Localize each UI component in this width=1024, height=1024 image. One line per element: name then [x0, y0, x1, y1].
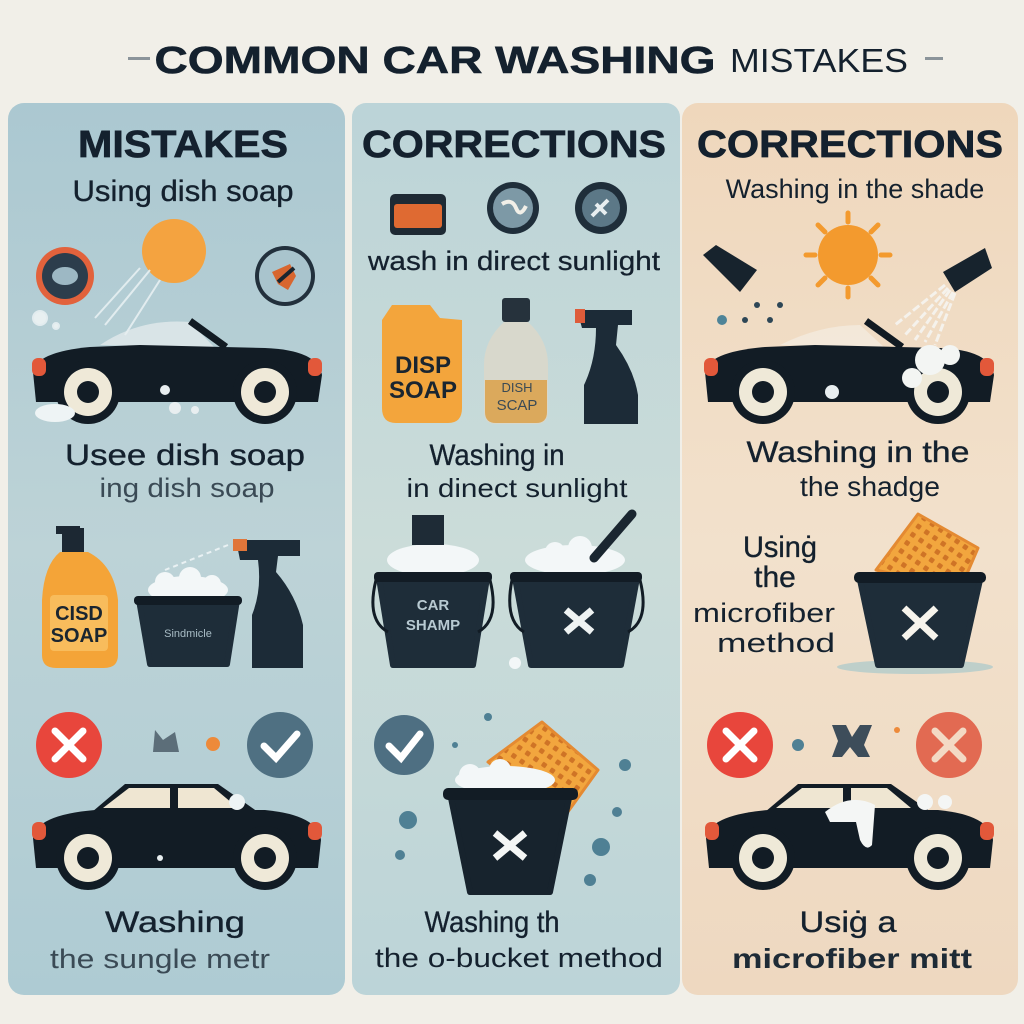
panel: corrections right	[682, 103, 1018, 995]
panel background right	[682, 103, 1018, 995]
caption: washing the two-bucket method	[375, 906, 663, 973]
icon: car shampoo bucket: SHAMP	[406, 617, 460, 634]
icon: small mixed glyph	[153, 730, 220, 752]
icon: spray bottle	[575, 309, 638, 424]
icon: right check	[247, 712, 313, 778]
title: MISTAKES	[730, 42, 908, 79]
subheading: wash in direct sunlight: wash in direct sunlight	[367, 246, 661, 276]
car: coupe	[32, 784, 322, 890]
icon: foam bucket: Sindmicle	[164, 628, 212, 640]
caption: washing the two-bucket method: Washing th	[424, 906, 560, 939]
title: COMMON CAR WASHING	[154, 40, 716, 82]
icon: sun with rays	[806, 213, 890, 297]
caption: using the microfiber method: microfiber	[693, 598, 835, 628]
icon: right spray nozzle	[895, 248, 992, 345]
caption: using the microfiber method: the	[754, 561, 796, 594]
panel: corrections middle	[352, 103, 680, 995]
heading: corrections: CORRECTIONS	[362, 124, 666, 166]
caption: using a microfiber mitt	[732, 906, 972, 974]
icon: wrong cross	[707, 712, 773, 778]
icon: bucket with cross	[509, 514, 643, 669]
icon: spray bottle	[165, 539, 303, 668]
caption: use dish soap: Usee dish soap	[65, 439, 305, 472]
caption: using a microfiber mitt: Usiġ a	[800, 906, 897, 939]
caption: washing in direct sunlight: in dinect sunlight	[406, 473, 628, 503]
title	[128, 40, 943, 82]
caption: washing in the shade: Washing in the	[746, 436, 970, 469]
caption: using the microfiber method: method	[717, 628, 835, 658]
heading: corrections: CORRECTIONS	[697, 124, 1003, 166]
caption: washing the single method	[50, 906, 270, 974]
icon: foam bucket	[134, 567, 242, 664]
panel: mistakes	[8, 103, 345, 995]
caption: use dish soap: ing dish soap	[100, 473, 274, 503]
caption: use dish soap	[65, 439, 305, 503]
caption: washing the two-bucket method: the o-bucket method	[375, 943, 663, 973]
heading: mistakes: MISTAKES	[78, 124, 288, 166]
water spray	[33, 268, 160, 335]
icon: car shampoo bucket	[373, 515, 493, 665]
panel background middle	[352, 103, 680, 995]
icon: bucket with sponge	[837, 514, 993, 674]
icon: left badge	[36, 247, 94, 305]
icon: orange sponge	[390, 194, 446, 235]
icon: sun	[142, 219, 206, 283]
icon: right badge	[255, 246, 315, 306]
icon: check	[374, 715, 434, 775]
car: convertible	[32, 321, 322, 424]
icon: faded cross	[916, 712, 982, 778]
caption: washing in the shade	[746, 436, 970, 502]
icon: dish soap bottle: SOAP	[51, 625, 107, 647]
icon: dish soap jug: DISP	[395, 352, 451, 379]
icon: small glyph	[792, 725, 900, 757]
caption: washing in the shade: the shadge	[800, 471, 940, 502]
car: convertible with foam	[704, 321, 994, 424]
caption: using the microfiber method	[693, 531, 835, 658]
caption: using a microfiber mitt: microfiber mitt	[732, 943, 972, 974]
icon: left spray nozzle	[703, 245, 783, 325]
icon: clear soap bottle: DISH	[501, 380, 533, 395]
caption: washing the single method: the sungle metr	[50, 944, 270, 974]
icon: dish soap bottle: CISD	[55, 603, 103, 625]
icon: dish soap bottle	[42, 526, 118, 668]
panel background left	[8, 103, 345, 995]
icon: wrong cross	[36, 712, 102, 778]
icon: car shampoo bucket: CAR	[417, 597, 449, 614]
icon: dish soap jug	[382, 305, 462, 423]
subheading: washing in the shade: Washing in the shade	[726, 174, 984, 204]
icon: round badge 1	[487, 182, 539, 234]
water droplets	[395, 713, 631, 886]
caption: using the microfiber method: Usinġ	[743, 531, 817, 564]
subheading: using dish soap: Using dish soap	[72, 175, 294, 208]
caption: washing in direct sunlight: Washing in	[430, 439, 564, 472]
car: coupe with foam	[705, 784, 994, 890]
icon: bucket with sponge	[443, 722, 598, 892]
caption: washing in direct sunlight	[406, 439, 628, 503]
icon: clear soap bottle	[484, 298, 548, 424]
caption: washing the single method: Washing	[105, 906, 245, 939]
icon: clear soap bottle: SCAP	[497, 397, 537, 414]
icon: round badge 2	[575, 182, 627, 234]
icon: dish soap jug: SOAP	[389, 377, 457, 404]
